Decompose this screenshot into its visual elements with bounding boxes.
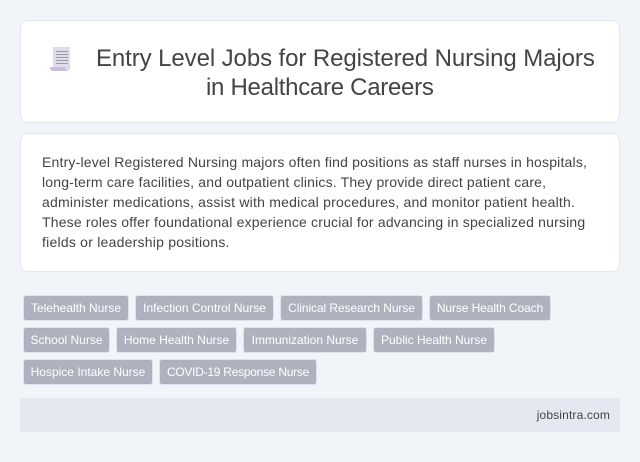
tag: Public Health Nurse — [381, 333, 487, 347]
tag — [429, 295, 551, 321]
tag — [23, 359, 153, 385]
tag — [116, 327, 237, 353]
icon: document scroll — [50, 47, 70, 71]
footer bar — [20, 398, 620, 432]
tag — [243, 327, 367, 353]
tag: COVID-19 Response Nurse — [167, 365, 309, 379]
tag: Infection Control Nurse — [143, 301, 266, 315]
tag: Nurse Health Coach — [437, 301, 543, 315]
panel: title card — [20, 20, 620, 123]
description text: fields or leadership positions. — [42, 234, 230, 250]
tag: School Nurse — [30, 333, 103, 347]
tag: Home Health Nurse — [124, 333, 229, 347]
description text: These roles offer foundational experience crucial for advancing in specialized nursing — [42, 214, 585, 230]
tag: Hospice Intake Nurse — [31, 365, 145, 379]
tag: Telehealth Nurse — [31, 301, 121, 315]
panel: description — [20, 133, 620, 272]
tag — [23, 295, 129, 321]
title — [96, 45, 595, 101]
description text: Entry-level Registered Nursing majors often find positions as staff nurses in hospitals, — [42, 154, 587, 170]
tag — [135, 295, 274, 321]
title: Entry Level Jobs for Registered Nursing Majors — [96, 45, 595, 72]
job tags — [23, 295, 551, 385]
footer source text: jobsintra.com — [537, 408, 610, 422]
description text: long-term care facilities, and outpatient clinics. They provide direct patient care, — [42, 174, 546, 190]
description text: administer medications, assist with medical procedures, and monitor patient health. — [42, 194, 575, 210]
title: in Healthcare Careers — [206, 74, 434, 101]
tag — [373, 327, 495, 353]
tag — [23, 327, 110, 353]
tag — [159, 359, 317, 385]
tag: Immunization Nurse — [252, 333, 358, 347]
tag: Clinical Research Nurse — [288, 301, 415, 315]
description text — [42, 154, 587, 250]
tag — [280, 295, 423, 321]
